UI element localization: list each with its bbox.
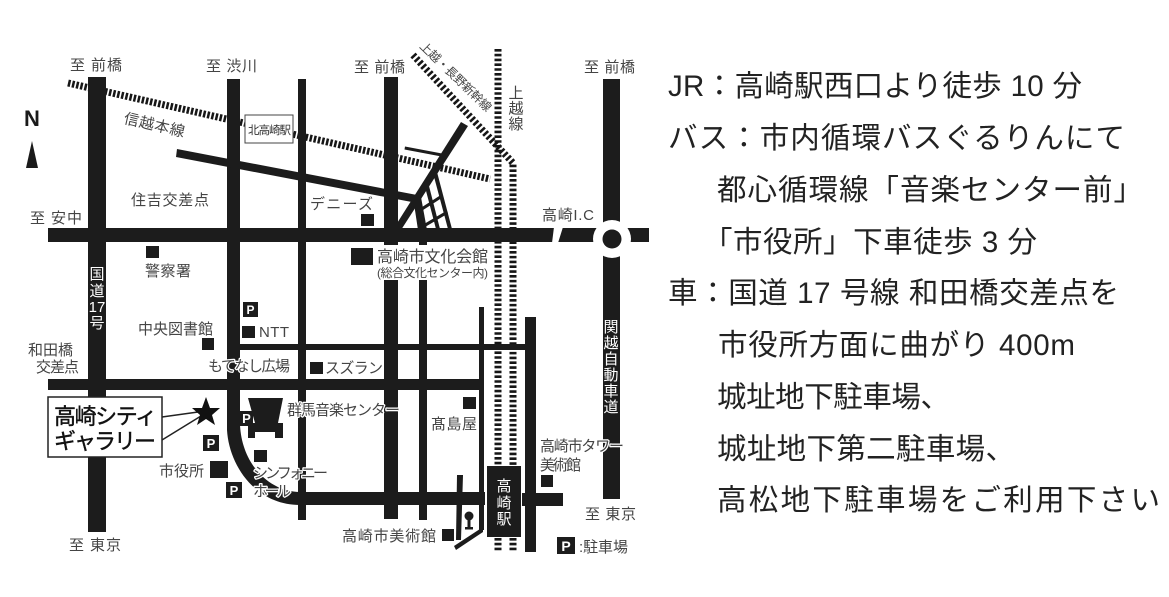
directions text: 都心循環線「音楽センター前」 [717,174,1143,207]
parking icons: P [230,483,239,498]
place names: 中央図書館 [138,321,213,338]
direction labels: 至 前橋 [70,57,122,74]
direction labels: 至 前橋 [354,59,405,76]
place names: 群馬音楽センター [287,402,400,419]
place names: 市役所 [159,463,204,480]
road name: route 17: 道 [89,283,105,300]
direction labels: 至 渋川 [206,58,257,75]
railway labels: 上越線 [506,85,524,131]
road name: kan-etsu expressway: 自 [603,351,619,368]
place names: (総合文化センター内) [377,265,488,280]
takasaki station [487,466,521,537]
railway labels: 上越・長野新幹線 [417,38,495,114]
road name: kan-etsu expressway: 関 [603,319,619,336]
road name: kan-etsu expressway: 動 [603,367,619,384]
place names: 高崎市美術館 [342,528,436,545]
railway labels: 信越本線 [122,110,186,141]
direction labels: 至 東京 [69,537,121,554]
place names: 交差点 [36,359,79,376]
directions text: 車：国道 17 号線 和田橋交差点を [668,277,1119,310]
callout: takasaki city gallery [48,397,201,457]
place names: スズラン [325,360,383,377]
icon: gallery star [192,397,220,425]
place names: 美術館 [540,457,581,474]
roads [48,77,649,552]
highway gap near interchange [552,227,563,243]
place names: 警察署 [145,263,191,280]
takasaki station: 高 [496,478,512,495]
direction labels: 至 東京 [585,506,636,523]
place names: 和田橋 [28,342,73,359]
road name: route 17: 号 [89,315,105,332]
road name: kan-etsu expressway [603,319,619,416]
road name: kan-etsu expressway: 越 [603,335,619,352]
parking legend: :駐車場 [579,539,628,556]
road name: kan-etsu expressway: 車 [603,383,619,400]
road name: route 17 [89,266,105,332]
north arrow [24,106,40,168]
takasaki station: 崎 [496,495,512,512]
place names: もてなし広場 [208,358,290,375]
road name: route 17: 国 [89,266,105,283]
north takasaki station: 北高崎駅 [248,123,292,137]
parking legend [557,537,628,556]
road name: route 17: 17 [89,299,105,316]
place names: NTT [259,324,289,341]
parking icons: P [207,436,216,451]
directions text: 「市役所」下車徒歩 3 分 [703,226,1037,259]
facility markers [146,214,553,541]
place names: ホール [253,483,291,500]
directions text: 市役所方面に曲がり 400m [718,329,1075,362]
directions text [668,70,1160,517]
interchange circle [593,220,631,258]
road name: kan-etsu expressway: 道 [603,399,619,416]
callout: takasaki city gallery: 高崎シティ [54,404,157,429]
place names [28,192,624,545]
directions text: 高松地下駐車場をご利用下さい [717,484,1160,517]
place names: 高崎市文化会館 [377,248,488,266]
north takasaki station [245,115,293,143]
direction labels [30,57,636,554]
place names: 髙島屋 [431,416,477,433]
road map [24,38,649,556]
parking icons: P [246,303,255,317]
parking icons [203,302,258,498]
directions text: 城址地下駐車場、 [717,381,950,414]
direction labels: 至 前橋 [584,59,635,76]
railway labels [122,38,524,141]
icon: monument [464,512,474,530]
parking icons: P [242,411,251,426]
railway lines [68,49,513,552]
north arrow: N [24,106,40,131]
place names: 高崎市タワー [540,438,624,455]
directions text: 城址地下第二駐車場、 [717,433,1015,466]
parking legend: P [561,538,571,554]
callout: takasaki city gallery: ギャラリー [54,429,156,454]
place names: 住吉交差点 [131,192,209,209]
place names: デニーズ [310,195,373,213]
takasaki station: 駅 [496,511,512,528]
place names: シンフォニー [253,465,328,482]
direction labels: 至 安中 [30,210,82,227]
directions text: JR：高崎駅西口より徒歩 10 分 [668,70,1082,103]
place names: 高崎I.C [542,207,594,224]
directions text: バス：市内循環バスぐるりんにて [668,122,1125,155]
